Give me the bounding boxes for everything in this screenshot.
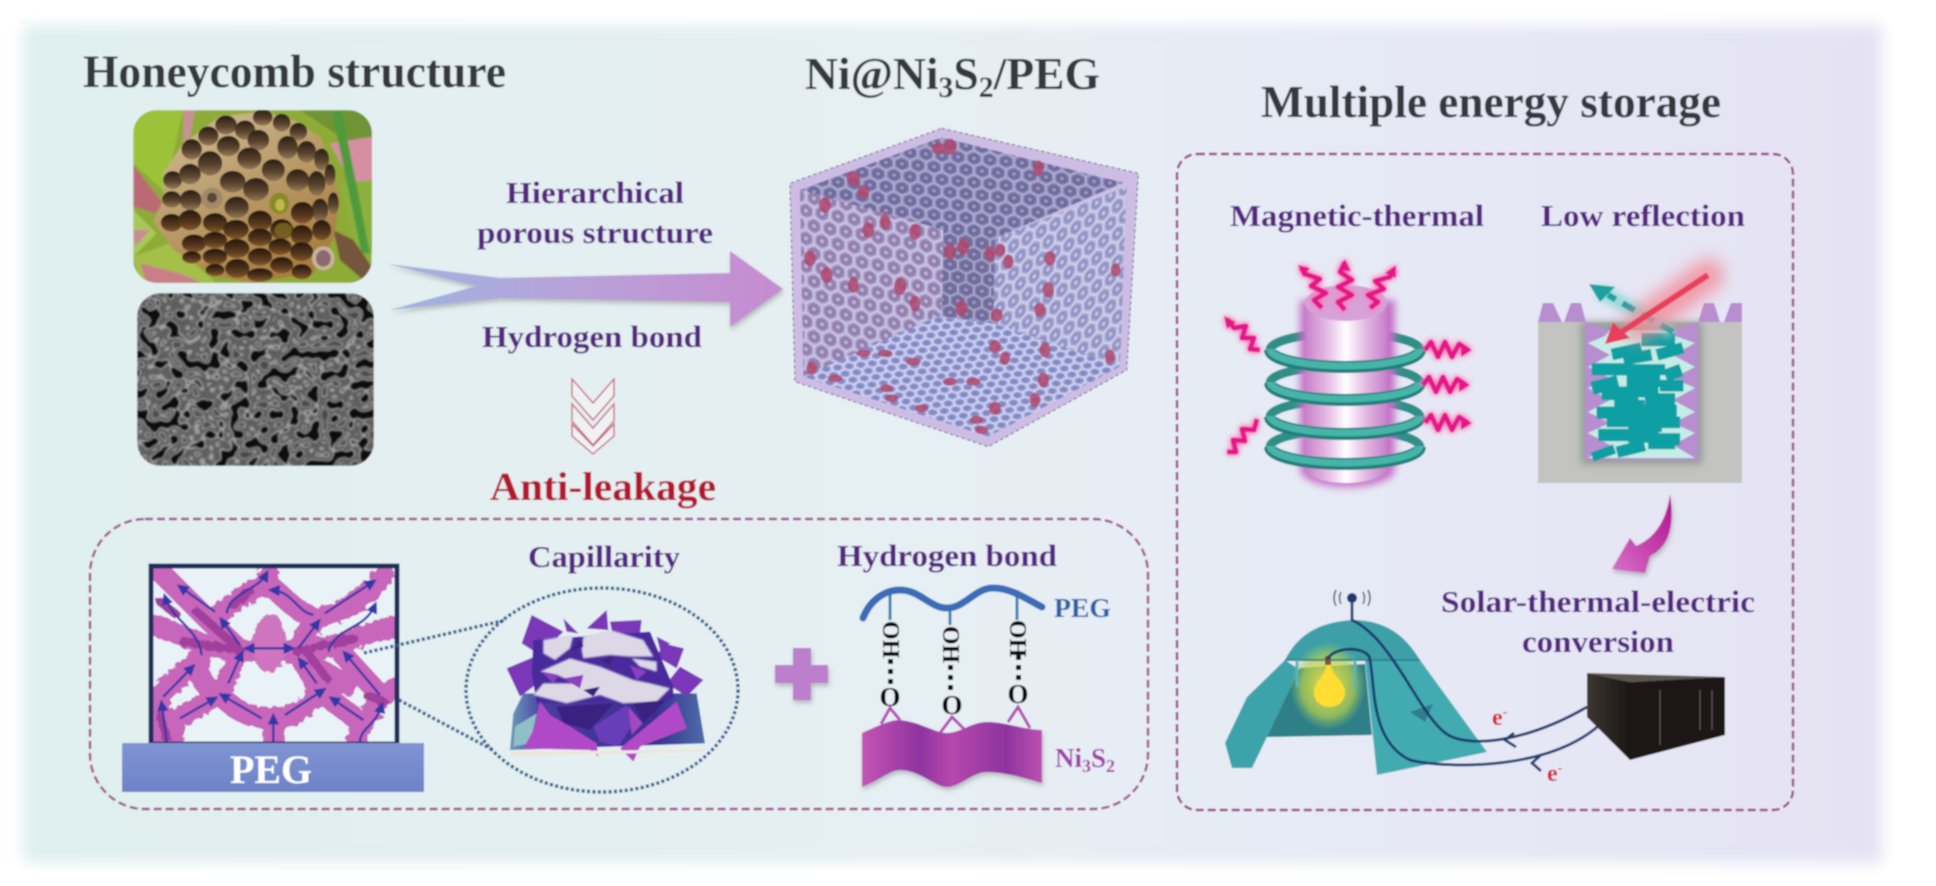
PEG chain xyxy=(863,588,1042,618)
Ni3S2 wavy sheet xyxy=(862,707,1042,787)
label: electron e- lower: - xyxy=(1558,761,1563,776)
title: Ni@Ni3S2/PEG: /PEG xyxy=(993,48,1100,99)
diagram: hydrogen bond structure: OH xyxy=(1004,620,1030,658)
label: electron e- lower: e xyxy=(1547,761,1558,787)
icon: downward chevrons xyxy=(572,379,614,454)
diagram: capillary network xyxy=(151,566,398,747)
label: electron e- upper: - xyxy=(1503,705,1508,720)
diagram: low reflection trench xyxy=(1538,303,1742,483)
bar: PEG reservoir: PEG xyxy=(230,747,312,792)
panel: multiple energy storage xyxy=(1177,154,1793,810)
label: Solar-thermal-electric conversion xyxy=(1441,584,1755,659)
arrow: incident ray xyxy=(1605,275,1708,344)
label: Hydrogen bond (detail): Hydrogen bond xyxy=(837,538,1057,573)
cube: Ni@Ni3S2/PEG cutaway xyxy=(790,128,1138,447)
icon: heat waves xyxy=(1224,259,1472,452)
title: Ni@Ni3S2/PEG: 3 xyxy=(939,71,953,104)
label: Hydrogen bond: Hydrogen bond xyxy=(482,319,702,354)
heading: Anti-leakage: Anti-leakage xyxy=(490,464,716,509)
wires: electron circuit xyxy=(1327,598,1615,771)
illustration: tent with bulb xyxy=(1225,620,1487,775)
label: electron e- upper: e xyxy=(1492,705,1503,731)
illustration: black thermoelectric device xyxy=(1587,673,1725,760)
label: Capillarity: Capillarity xyxy=(528,539,681,574)
label: Ni3S2 sheet: Ni xyxy=(1055,743,1082,773)
callout: zoom dotted circle xyxy=(364,588,738,792)
diagram: hydrogen bond structure: O xyxy=(879,682,901,712)
diagram: hydrogen bond structure: O xyxy=(941,690,963,720)
label: Ni3S2 sheet: 3 xyxy=(1082,756,1091,776)
diagram: hydrogen bond structure xyxy=(862,588,1042,787)
label: Magnetic-thermal: Magnetic-thermal xyxy=(1230,198,1484,233)
label: Solar-thermal-electric conversion: Solar-thermal-electric xyxy=(1441,584,1755,619)
title: Honeycomb structure: Honeycomb structure xyxy=(83,46,506,98)
label: Low reflection: Low reflection xyxy=(1541,198,1745,233)
diagram: hydrogen bond structure: OH xyxy=(937,626,963,664)
label: Hierarchical porous structure: porous structure xyxy=(477,215,713,250)
title: Ni@Ni3S2/PEG: S xyxy=(953,48,979,99)
diagram: hydrogen bond structure: OH xyxy=(877,621,903,659)
image: SEM micrograph xyxy=(137,293,374,466)
icon: magnetic coil and rod xyxy=(1270,285,1420,487)
title: Ni@Ni3S2/PEG: Ni@Ni xyxy=(805,48,940,99)
panel: anti-leakage xyxy=(90,519,1148,809)
arrow: curved magenta arrow xyxy=(1612,494,1672,573)
title: Multiple energy storage: Multiple energy storage xyxy=(1261,76,1721,127)
icon: plus sign xyxy=(775,648,828,700)
illustration: 3D capillary foam xyxy=(507,610,705,762)
label: PEG chain: PEG xyxy=(1054,593,1111,623)
bar: PEG reservoir xyxy=(122,743,424,792)
icon: antenna xyxy=(1334,590,1370,606)
label: Solar-thermal-electric conversion: conversion xyxy=(1522,624,1674,659)
title: Ni@Ni3S2/PEG: 2 xyxy=(979,71,994,104)
label: Hierarchical porous structure: Hierarchical xyxy=(506,175,684,210)
arrow: reflected ray xyxy=(1589,284,1673,332)
arrow: main process arrow xyxy=(388,251,783,327)
label: Ni3S2 sheet: S xyxy=(1091,743,1106,773)
diagram: hydrogen bond structure: O xyxy=(1007,679,1029,709)
label: Ni3S2 sheet: 2 xyxy=(1106,756,1115,776)
label: Hierarchical porous structure xyxy=(477,175,713,250)
photo: natural honeycomb xyxy=(133,110,373,283)
